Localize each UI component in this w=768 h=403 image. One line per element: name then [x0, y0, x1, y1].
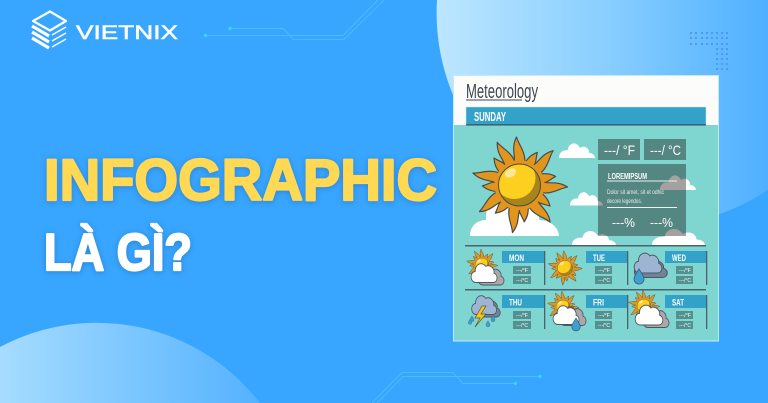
info box: Lorem ipsum: LOREMIPSUM — [608, 172, 647, 181]
forecast: Wednesday — [634, 251, 707, 285]
circuit lines top — [204, 0, 384, 40]
panel: weather infographic — [454, 76, 718, 341]
decorative circle bottom left — [0, 323, 260, 403]
logo: Vietnix — [32, 12, 178, 48]
forecast: Friday — [547, 291, 628, 331]
icon: rain cloud — [634, 253, 667, 284]
forecast: Saturday: ---/°C — [679, 323, 691, 329]
panel background — [454, 76, 718, 341]
forecast: Thursday: THU — [509, 298, 522, 308]
subtitle: LÀ GÌ?: LÀ GÌ? — [44, 224, 192, 282]
forecast: Wednesday: ---/°C — [679, 278, 691, 284]
forecast: Thursday — [468, 295, 545, 329]
clouds: main area — [470, 143, 705, 245]
heading: Meteorology: Meteorology — [466, 81, 538, 103]
circuit lines bottom — [372, 372, 542, 403]
forecast: Monday: MON — [509, 253, 524, 264]
forecast: Saturday — [628, 290, 707, 329]
forecast dividers — [465, 245, 706, 290]
temperature box C: ---/ °C — [650, 142, 681, 158]
forecast: Friday: ---/°F — [598, 313, 610, 319]
icon: sun and cloud — [466, 249, 504, 285]
forecast: Monday: ---/°F — [516, 268, 528, 274]
temperature box F — [598, 139, 640, 160]
temperature box C — [644, 139, 686, 160]
forecast: Saturday: SAT — [672, 298, 684, 308]
decorative circle top right — [437, 0, 768, 226]
forecast: Saturday: ---/°F — [679, 313, 691, 319]
temperature box F: ---/ °F — [604, 142, 635, 158]
header bar: Sunday — [466, 107, 706, 126]
forecast: Friday: FRI — [593, 298, 604, 308]
icon: large sun — [472, 137, 568, 233]
forecast: Wednesday: ---/°F — [679, 268, 691, 274]
forecast: Tuesday: ---/°F — [598, 268, 610, 274]
info box: Lorem ipsum: Dolor sit amet, sit et odhic — [607, 189, 665, 196]
icon: storm — [468, 296, 500, 327]
forecast: Tuesday: TUE — [593, 253, 605, 264]
icon: sun — [548, 251, 582, 285]
forecast: Tuesday — [548, 251, 628, 285]
info box: Lorem ipsum — [598, 164, 686, 236]
title: INFOGRAPHIC: INFOGRAPHIC — [44, 148, 437, 213]
forecast: Friday: ---/°C — [598, 323, 610, 329]
header bar: Sunday: SUNDAY — [474, 109, 506, 124]
forecast: Wednesday: WED — [672, 253, 686, 264]
info box: Lorem ipsum: ---% — [650, 215, 673, 230]
forecast: Tuesday: ---/°C — [598, 278, 610, 284]
info box: Lorem ipsum: ---% — [612, 215, 635, 230]
forecast: Thursday: ---/°C — [516, 323, 528, 329]
icon: sun, cloud and rain — [547, 291, 586, 331]
forecast: Thursday: ---/°F — [516, 313, 528, 319]
forecast: Monday — [466, 249, 545, 285]
wordmark: VIETNIX — [76, 22, 178, 44]
dot grid — [690, 32, 728, 70]
forecast: Monday: ---/°C — [516, 278, 528, 284]
icon: sun and cloud — [628, 290, 669, 328]
info box: Lorem ipsum: decore legendos. — [607, 198, 642, 205]
icon: server stack — [32, 12, 66, 48]
heading: Meteorology — [466, 81, 538, 103]
